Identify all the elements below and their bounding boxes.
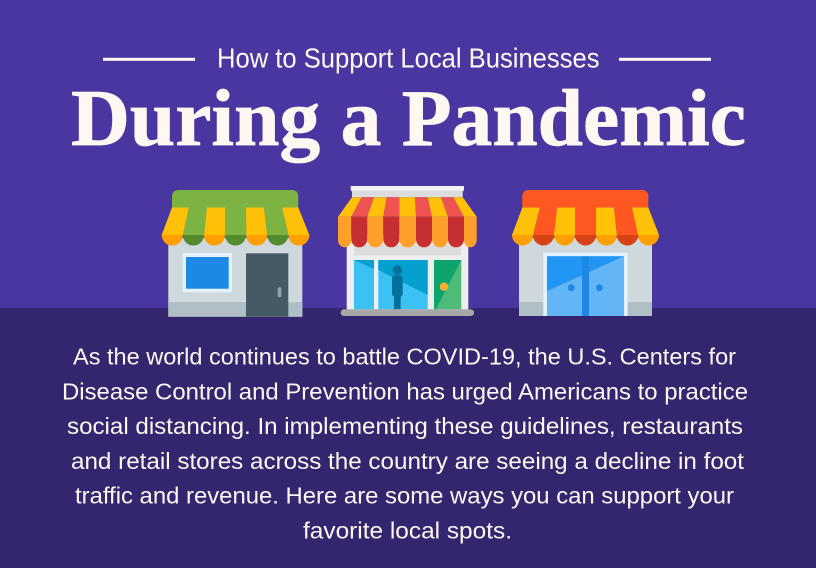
intro paragraph: favorite local spots.	[303, 518, 512, 544]
intro paragraph: Disease Control and Prevention has urged Americans to practice	[62, 378, 748, 404]
subtitle: How to Support Local Businesses	[217, 42, 600, 74]
icon: striped awning glass-front store	[338, 186, 477, 316]
intro paragraph: As the world continues to battle COVID-19, the U.S. Centers for	[73, 344, 736, 370]
intro paragraph: social distancing. In implementing these guidelines, restaurants	[67, 413, 743, 439]
intro paragraph: traffic and revenue. Here are some ways you can support your	[75, 483, 734, 509]
icon: person silhouette	[392, 265, 403, 309]
icon: orange awning store	[512, 190, 659, 316]
intro paragraph	[62, 344, 748, 544]
intro paragraph: and retail stores across the country are seeing a decline in foot	[71, 448, 744, 474]
icon: green awning store	[162, 190, 309, 317]
title: During a Pandemic	[71, 75, 746, 163]
